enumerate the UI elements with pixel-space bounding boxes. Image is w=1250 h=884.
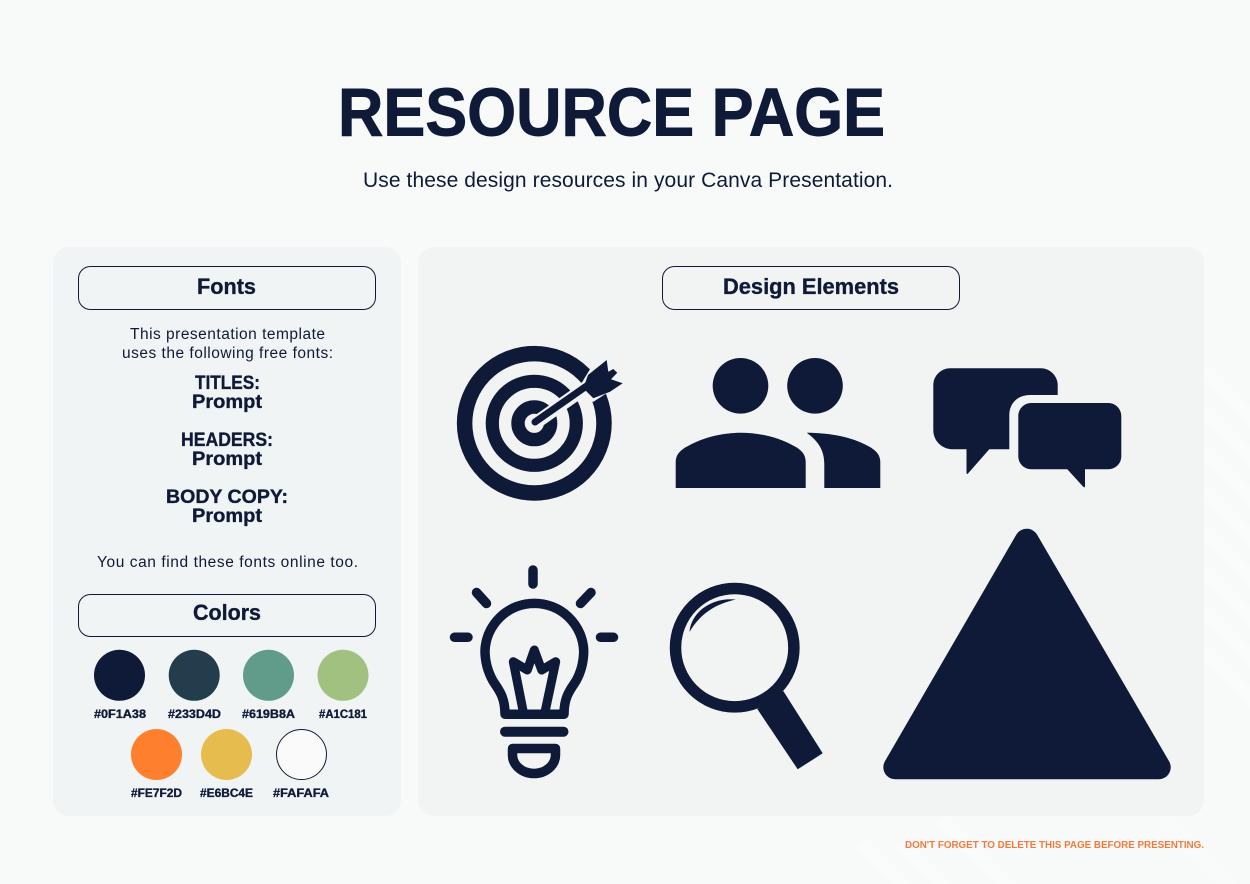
heading: design elements: Design Elements xyxy=(723,274,899,299)
swatch: 233D4D: #233D4D xyxy=(168,709,221,721)
text: headers font: Prompt xyxy=(192,449,263,470)
heading: fonts xyxy=(78,266,376,310)
text: fonts intro: This presentation template xyxy=(130,326,325,343)
swatch: 233D4D xyxy=(168,650,221,721)
swatch: FAFAFA xyxy=(273,730,329,800)
panel: fonts and colors xyxy=(53,247,401,816)
icon: magnifying glass xyxy=(676,588,823,769)
icon: light bulb xyxy=(454,570,614,774)
icon: target with arrow xyxy=(465,354,632,493)
text: body copy font: Prompt xyxy=(192,506,263,527)
text: titles font: Prompt xyxy=(192,392,263,413)
heading: fonts: Fonts xyxy=(197,274,256,299)
text: headers font: HEADERS: xyxy=(181,430,273,451)
text: fonts intro: uses the following free fonts: xyxy=(122,345,333,362)
swatch: FE7F2D xyxy=(131,729,182,800)
heading: design elements xyxy=(662,266,960,310)
text: fonts intro xyxy=(122,326,333,362)
swatch: 619B8A: #619B8A xyxy=(242,709,295,721)
swatch: A1C181: #A1C181 xyxy=(319,709,368,721)
panel: design elements xyxy=(418,247,1204,816)
text: headers font xyxy=(181,430,273,470)
title: RESOURCE PAGE xyxy=(338,74,885,150)
swatch: A1C181 xyxy=(318,650,368,721)
swatch: 0F1A38 xyxy=(94,650,147,721)
swatch: E6BC4E xyxy=(200,729,253,800)
subtitle: Use these design resources in your Canva Presentation. xyxy=(363,169,893,192)
text: titles font xyxy=(192,373,263,413)
swatch: FE7F2D: #FE7F2D xyxy=(131,788,182,800)
footer note: DON'T FORGET TO DELETE THIS PAGE BEFORE PRESENTING. xyxy=(905,840,1204,851)
text: body copy font: BODY COPY: xyxy=(166,487,288,508)
heading: colors: Colors xyxy=(193,600,261,625)
swatch: 619B8A xyxy=(242,650,295,721)
icon: rounded triangle xyxy=(895,541,1159,767)
text: body copy font xyxy=(166,487,288,527)
swatch: FAFAFA: #FAFAFA xyxy=(273,788,329,800)
heading: colors xyxy=(78,594,376,636)
icon: speech bubbles xyxy=(933,368,1121,487)
text: fonts note: You can find these fonts online too. xyxy=(97,554,358,571)
icon: two people xyxy=(676,358,880,488)
text: titles font: TITLES: xyxy=(195,373,260,394)
swatch: 0F1A38: #0F1A38 xyxy=(94,709,147,721)
swatch: E6BC4E: #E6BC4E xyxy=(200,788,253,800)
